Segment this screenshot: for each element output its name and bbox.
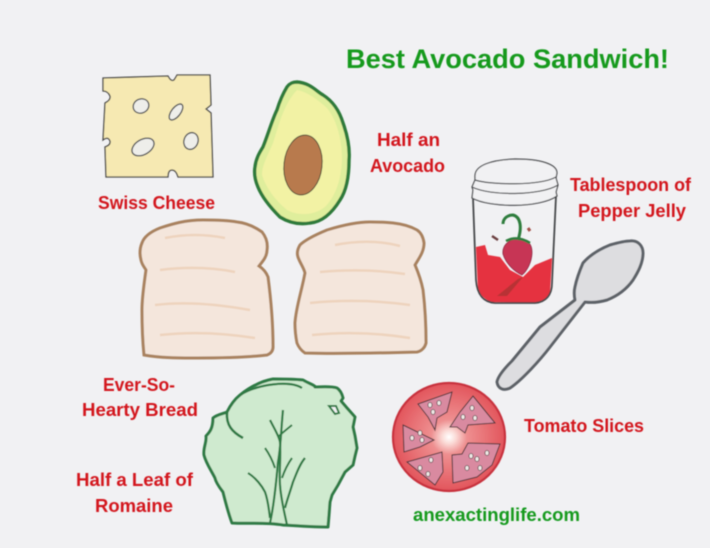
label: bread xyxy=(82,375,198,420)
icon: romaine leaf xyxy=(204,379,357,527)
label: bread: Ever-So- xyxy=(103,375,175,395)
icon: avocado xyxy=(255,82,349,224)
label: half an avocado xyxy=(370,130,445,176)
label: tomato slices: Tomato Slices xyxy=(524,416,644,436)
icon: spoon xyxy=(497,241,643,389)
label: half a leaf of romaine: Romaine xyxy=(95,496,173,516)
label: bread: Hearty Bread xyxy=(82,400,198,420)
label: half a leaf of romaine: Half a Leaf of xyxy=(76,470,194,490)
label: half an avocado: Avocado xyxy=(370,156,445,176)
icon: swiss cheese xyxy=(103,75,213,177)
icon: pepper jelly jar xyxy=(472,159,558,303)
label: tablespoon of pepper jelly: Pepper Jelly xyxy=(578,201,686,221)
title: Best Avocado Sandwich! xyxy=(346,44,669,74)
icon: bread slice left xyxy=(140,220,273,358)
label: half an avocado: Half an xyxy=(377,130,440,150)
icon: tomato slice xyxy=(393,383,505,491)
label: half a leaf of romaine xyxy=(76,470,194,516)
label: tablespoon of pepper jelly: Tablespoon of xyxy=(570,175,692,195)
icon: bread slice right xyxy=(295,222,426,353)
website credit: anexactinglife.com xyxy=(413,505,580,525)
label: tablespoon of pepper jelly xyxy=(570,175,692,221)
label: swiss cheese: Swiss Cheese xyxy=(98,193,215,213)
